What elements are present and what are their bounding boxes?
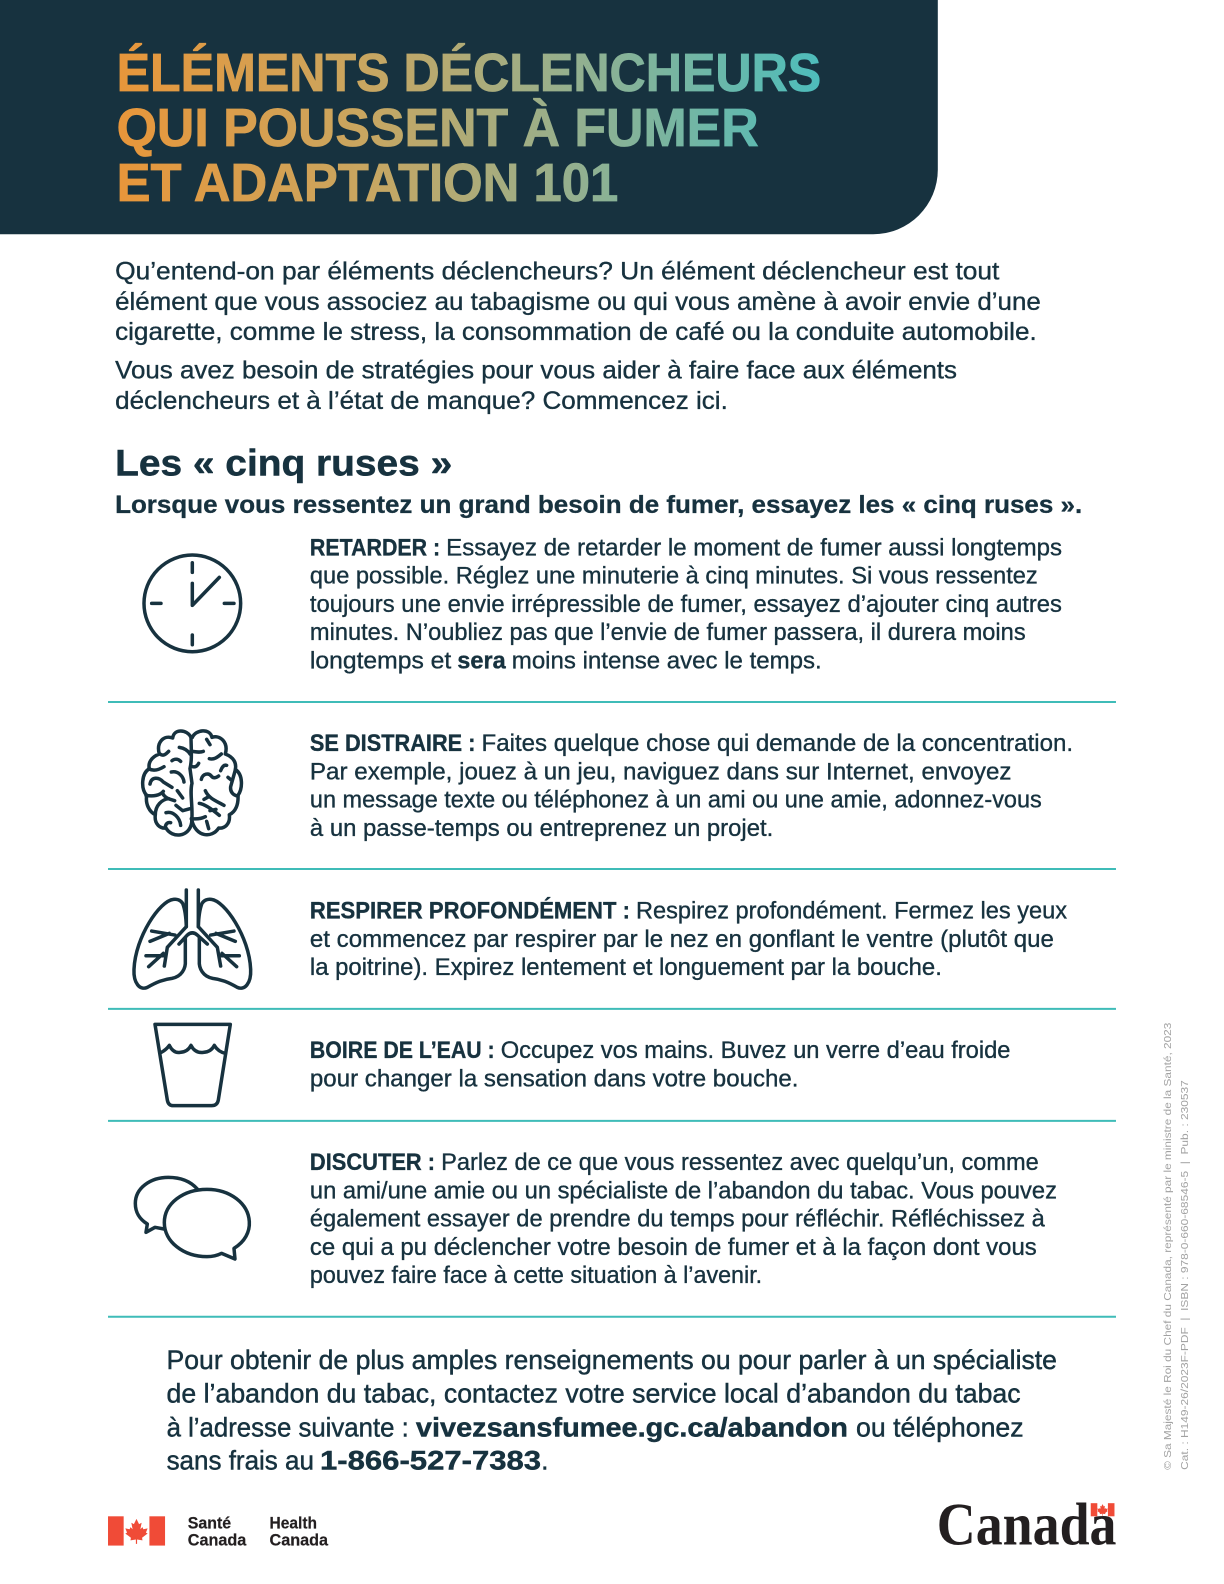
section heading: Les « cinq ruses » <box>115 442 452 484</box>
logo: Santé Canada / Health Canada: Health <box>270 1514 317 1532</box>
text: se distraire: SE DISTRAIRE : <box>310 731 475 757</box>
intro text: Qu’entend-on par éléments déclencheurs? Un élément déclencheur est tout <box>115 259 1000 286</box>
text: se distraire: un message texte ou téléphonez à un ami ou une amie, adonnez-vous <box>310 788 1042 814</box>
contact text: ou téléphonez <box>856 1413 1024 1443</box>
title: QUI POUSSENT À FUMER <box>117 98 759 158</box>
contact text: à l’adresse suivante : <box>167 1413 409 1443</box>
text: retarder: toujours une envie irrépressible de fumer, essayez d’ajouter cinq autres <box>310 592 1062 618</box>
text: discuter: pouvez faire face à cette situation à l’avenir. <box>310 1263 762 1289</box>
copyright side note: © Sa Majesté le Roi du Chef du Canada, représenté par le ministre de la Santé, 2023 <box>1163 1022 1174 1470</box>
text: discuter: également essayer de prendre du temps pour réfléchir. Réfléchissez à <box>310 1207 1046 1233</box>
icon: Canadian flag <box>108 1516 165 1546</box>
text: se distraire <box>310 731 1073 842</box>
copyright side note <box>1163 1022 1191 1470</box>
text: se distraire: Par exemple, jouez à un jeu, naviguez dans sur Internet, envoyez <box>310 759 1012 785</box>
title: ÉLÉMENTS DÉCLENCHEURS <box>117 43 821 103</box>
icon: brain <box>143 731 241 835</box>
text: retarder: minutes. N’oubliez pas que l’envie de fumer passera, il durera moins <box>310 620 1026 646</box>
logo: Santé Canada / Health Canada: Santé <box>188 1514 231 1532</box>
text: discuter: un ami/une amie ou un spécialiste de l’abandon du tabac. Vous pouvez <box>310 1178 1057 1204</box>
text: boire de l'eau <box>310 1038 1010 1092</box>
text: discuter: DISCUTER : <box>310 1150 435 1176</box>
title <box>117 43 821 213</box>
text: retarder: sera <box>457 648 507 674</box>
panel: boire de l'eau <box>155 1024 1010 1106</box>
contact text <box>167 1345 1057 1475</box>
icon: glass of water <box>155 1024 230 1106</box>
contact text: 1-866-527-7383 <box>320 1445 541 1475</box>
text: se distraire: à un passe-temps ou entreprenez un projet. <box>310 816 773 842</box>
header banner <box>0 0 938 234</box>
text: retarder: longtemps et <box>310 648 452 674</box>
contact text: vivezsansfumee.gc.ca/abandon <box>416 1413 848 1443</box>
text: boire de l'eau: Occupez vos mains. Buvez un verre d’eau froide <box>501 1038 1010 1064</box>
logo: Santé Canada / Health Canada: Canada <box>270 1532 329 1550</box>
text: retarder <box>310 535 1062 674</box>
intro text: Vous avez besoin de stratégies pour vous aider à faire face aux éléments <box>115 358 957 385</box>
text: boire de l'eau: BOIRE DE L’EAU : <box>310 1038 495 1064</box>
panel: discuter <box>135 1150 1057 1289</box>
panel: retarder <box>144 535 1062 674</box>
panel: respirer profondément <box>134 890 1067 988</box>
panel: se distraire <box>143 731 1073 842</box>
text: discuter: ce qui a pu déclencher votre besoin de fumer et à la façon dont vous <box>310 1235 1037 1261</box>
text: retarder: que possible. Réglez une minuterie à cinq minutes. Si vous ressentez <box>310 564 1038 590</box>
text: respirer profondément: Respirez profondément. Fermez les yeux <box>636 899 1067 925</box>
logo: Santé Canada / Health Canada <box>108 1514 329 1550</box>
icon: speech bubbles <box>135 1177 249 1259</box>
contact text: sans frais au <box>167 1445 314 1475</box>
text: discuter: Parlez de ce que vous ressentez avec quelqu’un, comme <box>441 1150 1039 1176</box>
copyright side note: Cat. : H149-26/2023F-PDF | ISBN : 978-0-660-68546-5 | Pub. : 230537 <box>1180 1080 1191 1470</box>
intro text: déclencheurs et à l’état de manque? Commencez ici. <box>115 388 728 415</box>
text: retarder: RETARDER : <box>310 535 440 561</box>
text: respirer profondément: et commencez par respirer par le nez en gonflant le ventre (plutôt que <box>310 927 1054 953</box>
logo: Canada wordmark: Canada <box>937 1492 1116 1559</box>
intro text: cigarette, comme le stress, la consommation de café ou la conduite automobile. <box>115 319 1037 346</box>
icon: clock <box>144 555 241 652</box>
text: boire de l'eau: pour changer la sensation dans votre bouche. <box>310 1066 799 1092</box>
intro text: élément que vous associez au tabagisme ou qui vous amène à avoir envie d’une <box>115 289 1041 316</box>
text: respirer profondément: RESPIRER PROFONDÉMENT : <box>310 897 630 925</box>
text: se distraire: Faites quelque chose qui demande de la concentration. <box>482 731 1073 757</box>
contact text: . <box>541 1445 548 1475</box>
intro text <box>115 259 1041 415</box>
contact text: Pour obtenir de plus amples renseignements ou pour parler à un spécialiste <box>167 1345 1057 1375</box>
section subheading: Lorsque vous ressentez un grand besoin de fumer, essayez les « cinq ruses ». <box>115 492 1082 519</box>
icon: lungs <box>134 890 251 988</box>
text: respirer profondément: la poitrine). Expirez lentement et longuement par la bouche. <box>310 955 942 981</box>
contact text: de l’abandon du tabac, contactez votre service local d’abandon du tabac <box>167 1379 1021 1409</box>
text: retarder: Essayez de retarder le moment de fumer aussi longtemps <box>446 535 1062 561</box>
text: discuter <box>310 1150 1057 1289</box>
text: retarder: moins intense avec le temps. <box>512 648 822 674</box>
title: ET ADAPTATION 101 <box>117 154 618 213</box>
text: respirer profondément <box>310 897 1067 981</box>
logo: Santé Canada / Health Canada: Canada <box>188 1532 247 1550</box>
